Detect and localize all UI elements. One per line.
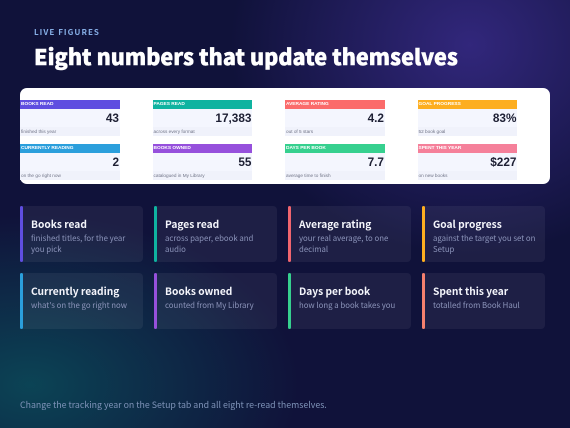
scorecard: books read: 43 <box>106 111 119 125</box>
card: books owned <box>154 273 277 329</box>
card: books read <box>20 206 143 262</box>
card: currently reading: Currently reading <box>31 283 119 298</box>
card: currently reading: what's on the go right now <box>31 300 127 310</box>
card: spent this year: totalled from Book Haul <box>433 300 520 310</box>
scorecard: days per book: DAYS PER BOOK <box>286 146 326 151</box>
scorecard: pages read: 17,383 <box>215 111 252 125</box>
panel: spreadsheet scorecards <box>20 88 550 184</box>
scorecard: currently reading: on the go right now <box>21 172 61 178</box>
card: goal progress: against the target you set on Setup <box>433 232 535 255</box>
card: books read: Books read <box>31 216 87 231</box>
card: spent this year <box>422 273 545 329</box>
card: pages read: Pages read <box>165 216 219 231</box>
card: goal progress <box>422 206 545 262</box>
card: days per book: how long a book takes you <box>299 300 395 310</box>
scorecard: goal progress: 83% <box>493 111 516 125</box>
scorecard: days per book: average time to finish <box>286 172 331 178</box>
scorecard: goal progress: 52 book goal <box>418 128 445 134</box>
card: days per book: Days per book <box>299 283 370 298</box>
card: pages read: across paper, ebook and audio <box>165 232 253 255</box>
scorecard: goal progress: GOAL PROGRESS <box>418 102 461 107</box>
scorecard: currently reading: 2 <box>112 155 119 169</box>
scorecard: pages read <box>152 100 252 136</box>
scorecard: days per book <box>285 144 384 180</box>
eyebrow label: LIVE FIGURES <box>34 27 100 38</box>
scorecard: spent this year <box>418 144 517 180</box>
scorecard: pages read: PAGES READ <box>154 102 185 107</box>
card: books read: finished titles, for the year you pick <box>31 232 125 255</box>
scorecard: spent this year: on new books <box>418 172 447 178</box>
scorecard: average rating: AVERAGE RATING <box>286 102 329 107</box>
card: currently reading <box>20 273 143 329</box>
scorecard: books owned: BOOKS OWNED <box>154 146 191 151</box>
scorecard: books owned: catalogued in My Library <box>154 172 205 178</box>
card: days per book <box>288 273 411 329</box>
scorecard: books read: BOOKS READ <box>21 102 54 107</box>
scorecard: average rating <box>285 100 384 136</box>
card: books owned: counted from My Library <box>165 300 254 310</box>
scorecard: spent this year: $227 <box>490 155 516 169</box>
footer note: Change the tracking year on the Setup tab and all eight re-read themselves. <box>20 398 327 411</box>
card: books owned: Books owned <box>165 283 232 298</box>
scorecard: goal progress <box>418 100 517 136</box>
scorecard: books owned <box>152 144 252 180</box>
card: average rating: Average rating <box>299 216 371 231</box>
title: Eight numbers that update themselves <box>34 41 458 72</box>
card: goal progress: Goal progress <box>433 216 502 231</box>
scorecard: average rating: 4.2 <box>368 111 384 125</box>
scorecard: books read: finished this year <box>21 128 56 134</box>
scorecard: days per book: 7.7 <box>368 155 384 169</box>
card: spent this year: Spent this year <box>433 283 508 298</box>
scorecard: average rating: out of 5 stars <box>286 128 313 134</box>
scorecard: spent this year: SPENT THIS YEAR <box>418 146 461 151</box>
scorecard: currently reading <box>20 144 120 180</box>
scorecard: pages read: across every format <box>154 128 195 134</box>
card: average rating: your real average, to one decimal <box>299 232 388 255</box>
scorecard: books owned: 55 <box>238 155 252 169</box>
scorecard: books read <box>20 100 120 136</box>
scorecard: currently reading: CURRENTLY READING <box>21 146 74 151</box>
card: pages read <box>154 206 277 262</box>
card: average rating <box>288 206 411 262</box>
